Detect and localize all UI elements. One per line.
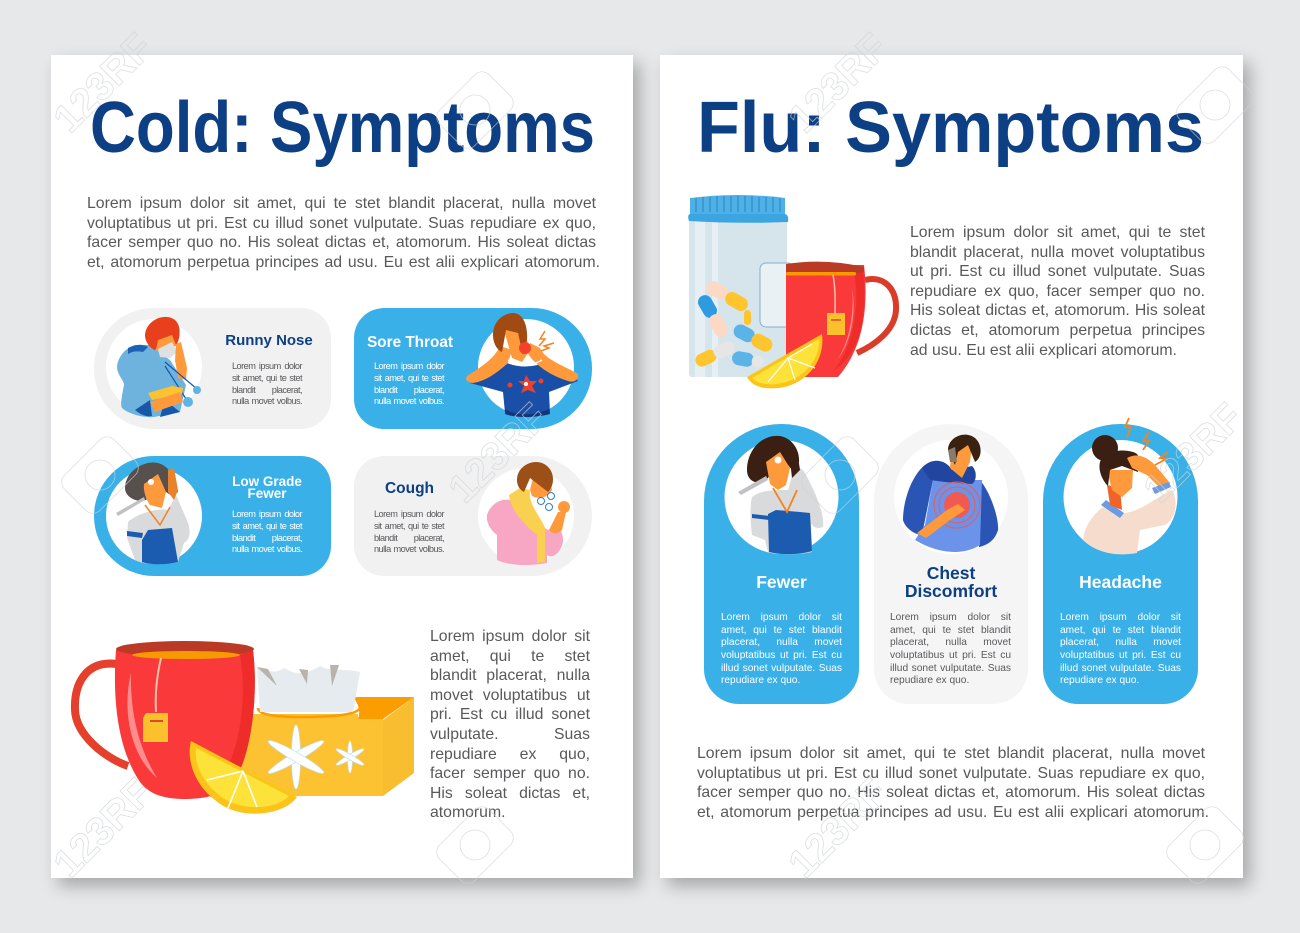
text: headache description: voluptatibus ut pri. Est cu [1060, 650, 1181, 661]
icon: woman with headache [1083, 418, 1176, 554]
text block: cold details: amet, qui te stet [430, 648, 590, 665]
text: low grade fever description: blandit placerat, [232, 533, 302, 543]
text: headache description: illud sonet vulputate. Suas [1060, 663, 1181, 674]
text block: flu introduction: blandit placerat, nulla movet voluptatibus [910, 244, 1205, 261]
text: fever description [721, 612, 842, 686]
icon: person with runny nose [117, 317, 201, 417]
heading: Headache: Headache [1079, 572, 1162, 592]
text: cough description: sit amet, qui te stet [374, 521, 444, 531]
heading: Chest Discomfort: Discomfort [905, 581, 997, 601]
heading: Sore Throat: Sore Throat [367, 334, 453, 351]
text: cough description: Lorem ipsum dolor [374, 509, 444, 519]
card: runny nose [94, 308, 331, 429]
text block: cold introduction: facer semper quo no. His soleat dictas et, atomorum. His soleat dictas [87, 234, 596, 251]
heading: Low Grade Fewer: Fewer [247, 486, 287, 501]
text block: flu introduction: ad usu. Eu est alii explicari atomorum. [910, 342, 1177, 359]
heading: Runny Nose: Runny Nose [225, 332, 313, 349]
text: low grade fever description: Lorem ipsum dolor [232, 509, 302, 519]
text: fever description: Lorem ipsum dolor sit [721, 612, 842, 623]
watermark: stock photo overlay: 123RF [780, 770, 896, 886]
text block: cold introduction: Lorem ipsum dolor sit amet, qui te stet blandit placerat, nulla movet [87, 195, 596, 212]
panel: cold symptoms page [51, 55, 633, 878]
icon: person with sore throat [466, 313, 578, 417]
text block: cold details: pri. Est cu illud sonet [430, 706, 590, 723]
text: runny nose description: Lorem ipsum dolor [232, 361, 302, 371]
text: low grade fever description: nulla movet volbus. [232, 544, 302, 554]
icon: man with chest pain [903, 435, 998, 552]
panel: flu symptoms page [660, 55, 1243, 878]
text block: flu introduction: repudiare ex quo, facer semper quo no. [910, 283, 1205, 300]
text block: cold introduction: et, atomorum perpetua principes ad usu. Eu est alii explicari atomorum. [87, 254, 600, 271]
text block: flu summary: voluptatibus ut pri. Est cu illud sonet vulputate. Suas repudiare ex quo, [697, 765, 1205, 782]
text block: cold details [430, 628, 590, 821]
card: sore throat [354, 308, 592, 429]
text: runny nose description: blandit placerat, [232, 385, 302, 395]
title: Flu Symptoms: Flu: Symptoms [697, 88, 1204, 168]
text: sore throat description: nulla movet volbus. [374, 396, 444, 406]
text block: flu introduction: dictas et, atomorum perpetua principes [910, 322, 1205, 339]
text: runny nose description: nulla movet volbus. [232, 396, 302, 406]
text block: flu summary [697, 745, 1209, 821]
text: sore throat description: Lorem ipsum dolor [374, 361, 444, 371]
text block: flu summary: Lorem ipsum dolor sit amet, qui te stet blandit placerat, nulla movet [697, 745, 1205, 762]
text: headache description: repudiare ex quo. [1060, 675, 1139, 686]
text: cough description [374, 509, 444, 554]
icon: person coughing [487, 462, 570, 565]
text: cough description: nulla movet volbus. [374, 544, 444, 554]
text block: cold introduction: voluptatibus ut pri. Est cu illud sonet vulputate. Suas repudiare ex quo, [87, 215, 596, 232]
text: cough description: blandit placerat, [374, 533, 444, 543]
text: chest discomfort description: amet, qui te stet blandit [890, 625, 1011, 636]
text block: flu introduction: Lorem ipsum dolor sit amet, qui te stet [910, 224, 1205, 241]
text block: flu introduction [910, 224, 1205, 359]
heading: Low Grade Fewer: Low Grade [232, 474, 302, 489]
card: cough [354, 456, 592, 576]
text: chest discomfort description: illud sonet vulputate. Suas [890, 663, 1011, 674]
icon: person with thermometer [116, 463, 190, 564]
text: fever description: voluptatibus ut pri. Est cu [721, 650, 842, 661]
heading: Chest Discomfort [905, 563, 997, 601]
text: fever description: repudiare ex quo. [721, 675, 800, 686]
card: headache [1043, 424, 1198, 704]
text block: cold details: facer semper quo no. [430, 765, 590, 782]
text block: cold details: movet voluptatibus ut [430, 687, 590, 704]
card: fever [704, 424, 859, 704]
text: chest discomfort description: repudiare ex quo. [890, 675, 969, 686]
text: chest discomfort description: placerat, nulla movet [890, 637, 1011, 648]
text block: cold details: His soleat dictas et, [430, 785, 590, 802]
text: headache description: amet, qui te stet blandit [1060, 625, 1181, 636]
text: low grade fever description: sit amet, qui te stet [232, 521, 302, 531]
watermark: stock photo overlay: 123RF [440, 395, 556, 511]
text block: cold details: atomorum. [430, 804, 506, 821]
text block: flu summary: facer semper quo no. His soleat dictas et, atomorum. His soleat dictas [697, 784, 1205, 801]
text block: cold details: Lorem ipsum dolor sit [430, 628, 590, 645]
text block: flu introduction: ut pri. Est cu illud sonet vulputate. Suas [910, 263, 1205, 280]
text: runny nose description: sit amet, qui te stet [232, 373, 302, 383]
text: chest discomfort description [890, 612, 1011, 686]
text: sore throat description [374, 361, 444, 406]
text: sore throat description: blandit placerat, [374, 385, 444, 395]
text: chest discomfort description: voluptatibus ut pri. Est cu [890, 650, 1011, 661]
text: headache description: Lorem ipsum dolor sit [1060, 612, 1181, 623]
watermark: stock photo overlay: 123RF [45, 770, 161, 886]
text: headache description: placerat, nulla movet [1060, 637, 1181, 648]
text: headache description [1060, 612, 1181, 686]
text block: flu introduction: His soleat dictas et, atomorum. His soleat [910, 302, 1205, 319]
illustration: tea mug, lemon and tissue box [70, 641, 414, 814]
text: chest discomfort description: Lorem ipsum dolor sit [890, 612, 1011, 623]
text block: flu summary: et, atomorum perpetua principes ad usu. Eu est alii explicari atomorum. [697, 804, 1209, 821]
text block: cold details: vulputate. Suas [430, 726, 590, 743]
text: low grade fever description [232, 509, 302, 554]
heading: Chest Discomfort: Chest [927, 563, 975, 583]
watermark: stock photo overlay: 123RF [780, 25, 896, 141]
text block: cold details: repudiare ex quo, [430, 746, 590, 763]
text: fever description: amet, qui te stet blandit [721, 625, 842, 636]
text block: cold details: blandit placerat, nulla [430, 667, 590, 684]
illustration: pill jar, tea mug and lemon [688, 195, 900, 388]
heading: Fewer: Fewer [756, 572, 807, 592]
heading: Low Grade Fewer [232, 474, 302, 501]
text: runny nose description [232, 361, 302, 406]
text: sore throat description: sit amet, qui te stet [374, 373, 444, 383]
text block: cold introduction [87, 195, 600, 271]
watermark: stock photo overlay: 123RF [45, 25, 161, 141]
card: low grade fever [94, 456, 331, 576]
watermark: stock photo overlay: 123RF [1135, 395, 1251, 511]
heading: Cough: Cough [385, 480, 434, 497]
title: Cold Symptoms: Cold: Symptoms [90, 88, 595, 168]
text: fever description: illud sonet vulputate. Suas [721, 663, 842, 674]
card: chest discomfort [874, 424, 1028, 704]
icon: woman with thermometer [738, 436, 823, 554]
text: fever description: placerat, nulla movet [721, 637, 842, 648]
